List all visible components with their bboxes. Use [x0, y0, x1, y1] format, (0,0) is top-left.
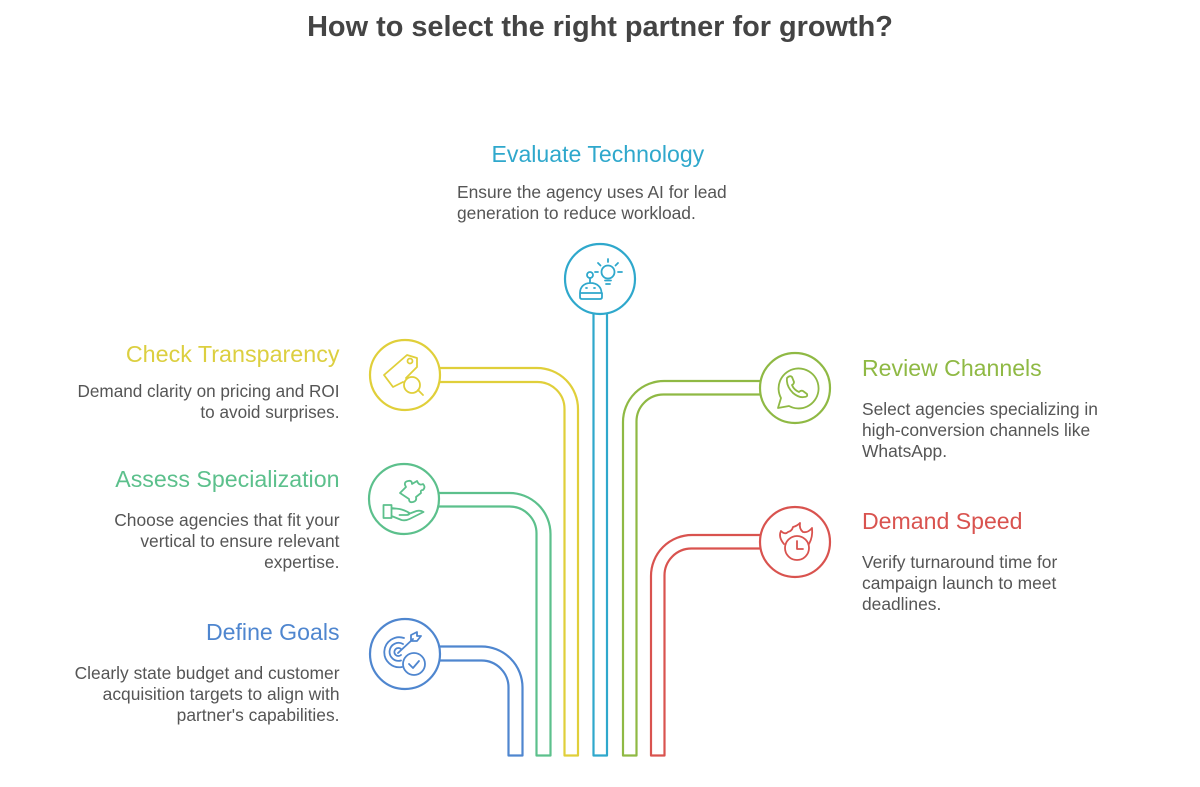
- icon: robot and light bulb: [565, 244, 635, 314]
- text: evaluate technology: Ensure the agency uses AI for lead: [457, 182, 727, 202]
- text: demand speed: deadlines.: [862, 594, 941, 614]
- text: define goals: acquisition targets to align with: [103, 684, 340, 704]
- pipe: evaluate technology: [594, 312, 607, 756]
- icon: flame with clock: [760, 507, 830, 577]
- text: evaluate technology: [457, 182, 727, 223]
- text: review channels: WhatsApp.: [862, 441, 947, 461]
- text: check transparency: [78, 381, 340, 422]
- icon: hand holding puzzle piece: [369, 464, 439, 534]
- text: review channels: Select agencies specializing in: [862, 399, 1098, 419]
- heading: assess specialization: Assess Specialization: [115, 466, 340, 492]
- section: evaluate technology: [457, 141, 727, 223]
- text: check transparency: Demand clarity on pricing and ROI: [78, 381, 340, 401]
- section: assess specialization: [114, 466, 340, 572]
- text: define goals: Clearly state budget and customer: [75, 663, 340, 683]
- section: review channels: [862, 355, 1098, 461]
- pipe: assess specialization: [438, 493, 550, 756]
- heading: check transparency: Check Transparency: [126, 341, 340, 367]
- icon: target, arrow and check badge: [370, 619, 440, 689]
- text: define goals: partner's capabilities.: [177, 705, 340, 725]
- heading: review channels: Review Channels: [862, 355, 1042, 381]
- text: demand speed: Verify turnaround time for: [862, 552, 1057, 572]
- pipe: review channels: [623, 381, 761, 756]
- text: demand speed: campaign launch to meet: [862, 573, 1056, 593]
- heading: define goals: Define Goals: [206, 619, 340, 645]
- text: evaluate technology: generation to reduce workload.: [457, 203, 696, 223]
- text: review channels: high-conversion channels like: [862, 420, 1090, 440]
- heading: demand speed: Demand Speed: [862, 508, 1022, 534]
- text: assess specialization: vertical to ensure relevant: [140, 531, 340, 551]
- text: define goals: [75, 663, 340, 725]
- heading: evaluate technology: Evaluate Technology: [492, 141, 704, 167]
- pipe: define goals: [439, 646, 523, 756]
- pipe: demand speed: [651, 535, 761, 756]
- section: define goals: [75, 619, 340, 725]
- text: review channels: [862, 399, 1098, 461]
- icon: whatsapp chat bubble: [760, 353, 830, 423]
- text: check transparency: to avoid surprises.: [200, 402, 340, 422]
- section: demand speed: [862, 508, 1057, 614]
- title: How to select the right partner for growth?: [307, 11, 893, 43]
- text: assess specialization: [114, 510, 340, 572]
- text: assess specialization: Choose agencies that fit your: [114, 510, 340, 530]
- icon: price tag and magnifier: [370, 340, 440, 410]
- pipe: check transparency: [439, 368, 578, 756]
- text: assess specialization: expertise.: [264, 552, 340, 572]
- section: check transparency: [78, 341, 340, 422]
- text: demand speed: [862, 552, 1057, 614]
